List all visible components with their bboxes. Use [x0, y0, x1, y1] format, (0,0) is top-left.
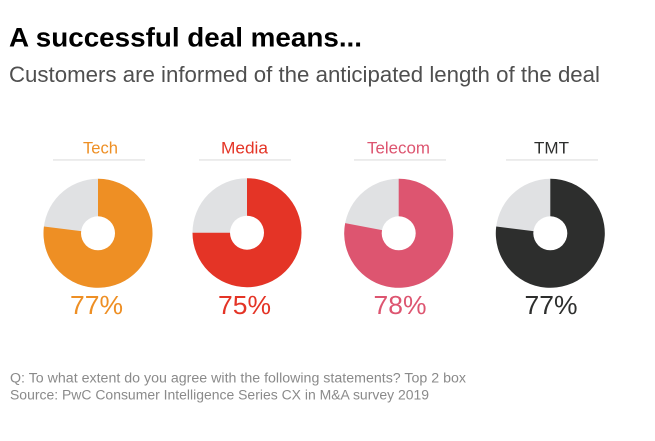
panel: Media [192, 140, 302, 320]
label: Tech: Tech [83, 140, 118, 158]
donut chart: TMT 77% [496, 179, 605, 288]
value: Media: 75% [218, 292, 271, 320]
footnote [10, 371, 466, 402]
panel: TMT [496, 140, 605, 320]
title: A successful deal means... [9, 23, 362, 53]
panel: Tech [44, 140, 153, 320]
donut chart: Media 75% [192, 178, 302, 287]
value: Telecom: 78% [374, 292, 426, 320]
subtitle: Customers are informed of the anticipated length of the deal [9, 62, 600, 87]
label: Media: Media [221, 140, 269, 158]
footnote: Q: To what extent do you agree with the following statements? Top 2 box [10, 371, 466, 386]
value: Tech: 77% [70, 292, 123, 320]
panel: Telecom [344, 140, 453, 320]
footnote: Source: PwC Consumer Intelligence Series CX in M&A survey 2019 [10, 387, 429, 402]
donut chart: Telecom 78% [344, 179, 453, 288]
donut chart: Tech 77% [44, 179, 153, 288]
value: TMT: 77% [524, 292, 578, 320]
label: Telecom: Telecom [367, 140, 430, 158]
label: TMT: TMT [534, 140, 569, 158]
